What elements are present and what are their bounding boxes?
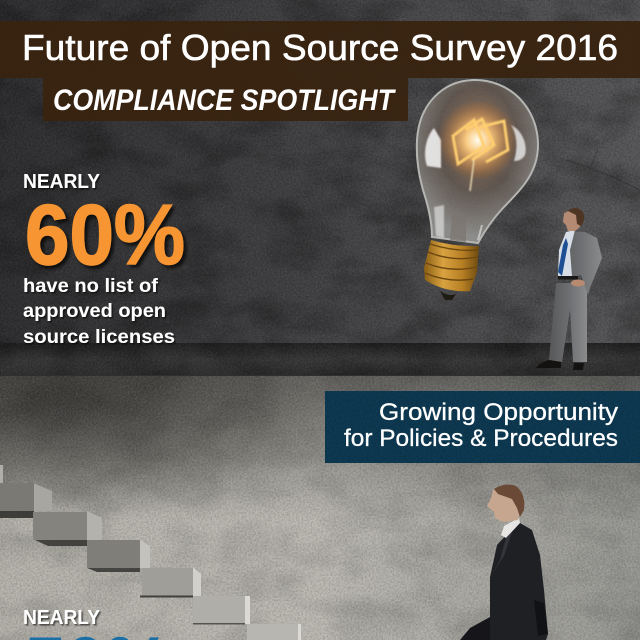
hair xyxy=(494,485,524,517)
icon: glowing light bulb xyxy=(417,80,538,300)
belt xyxy=(558,276,578,280)
stat: nearly 60%: source licenses xyxy=(23,327,175,348)
title: Future of Open Source Survey 2016 xyxy=(22,27,618,68)
label: NEARLY xyxy=(23,171,101,193)
step 6 xyxy=(247,624,301,640)
bulb glass xyxy=(417,80,538,243)
brass screw base xyxy=(424,240,479,300)
section banner: policies and procedures: for Policies & Procedures xyxy=(344,425,618,452)
collar xyxy=(501,518,520,538)
banner heading: Growing Opportunity xyxy=(379,399,618,426)
hair xyxy=(568,208,584,226)
tie xyxy=(558,238,568,276)
step 3 xyxy=(87,540,150,572)
label and big number: NEARLY xyxy=(23,607,101,629)
panel: dark concrete wall section xyxy=(0,0,640,376)
jacket xyxy=(490,523,548,640)
step 5 xyxy=(193,596,250,624)
stat: nearly 50% xyxy=(23,607,170,640)
panel: light concrete wall section xyxy=(0,376,640,640)
illustration: concrete staircase xyxy=(0,465,301,640)
section banner: policies and procedures xyxy=(325,391,640,463)
title banner xyxy=(0,21,640,78)
lapel xyxy=(492,532,512,574)
filament xyxy=(453,119,508,191)
shoes xyxy=(536,360,584,370)
jacket xyxy=(557,231,602,295)
legs xyxy=(549,283,587,362)
stat: nearly 60% xyxy=(23,171,185,348)
label and big number xyxy=(23,607,170,640)
head xyxy=(487,487,521,522)
step 4 xyxy=(140,567,201,598)
filament glow xyxy=(438,100,518,180)
subtitle: COMPLIANCE SPOTLIGHT xyxy=(53,84,396,117)
big number: 60% xyxy=(25,188,185,283)
head xyxy=(563,210,584,231)
description: have no list of xyxy=(23,276,159,297)
stat: nearly 60%: approved open xyxy=(23,301,166,322)
step 1 xyxy=(0,483,52,518)
shirt xyxy=(558,230,575,277)
step 2 xyxy=(33,511,102,546)
illustration: businessman climbing stairs xyxy=(460,485,548,640)
raised leg xyxy=(460,617,495,640)
subtitle banner xyxy=(43,78,408,121)
illustration: businessman looking up at bulb xyxy=(536,208,602,370)
hand xyxy=(571,280,585,286)
